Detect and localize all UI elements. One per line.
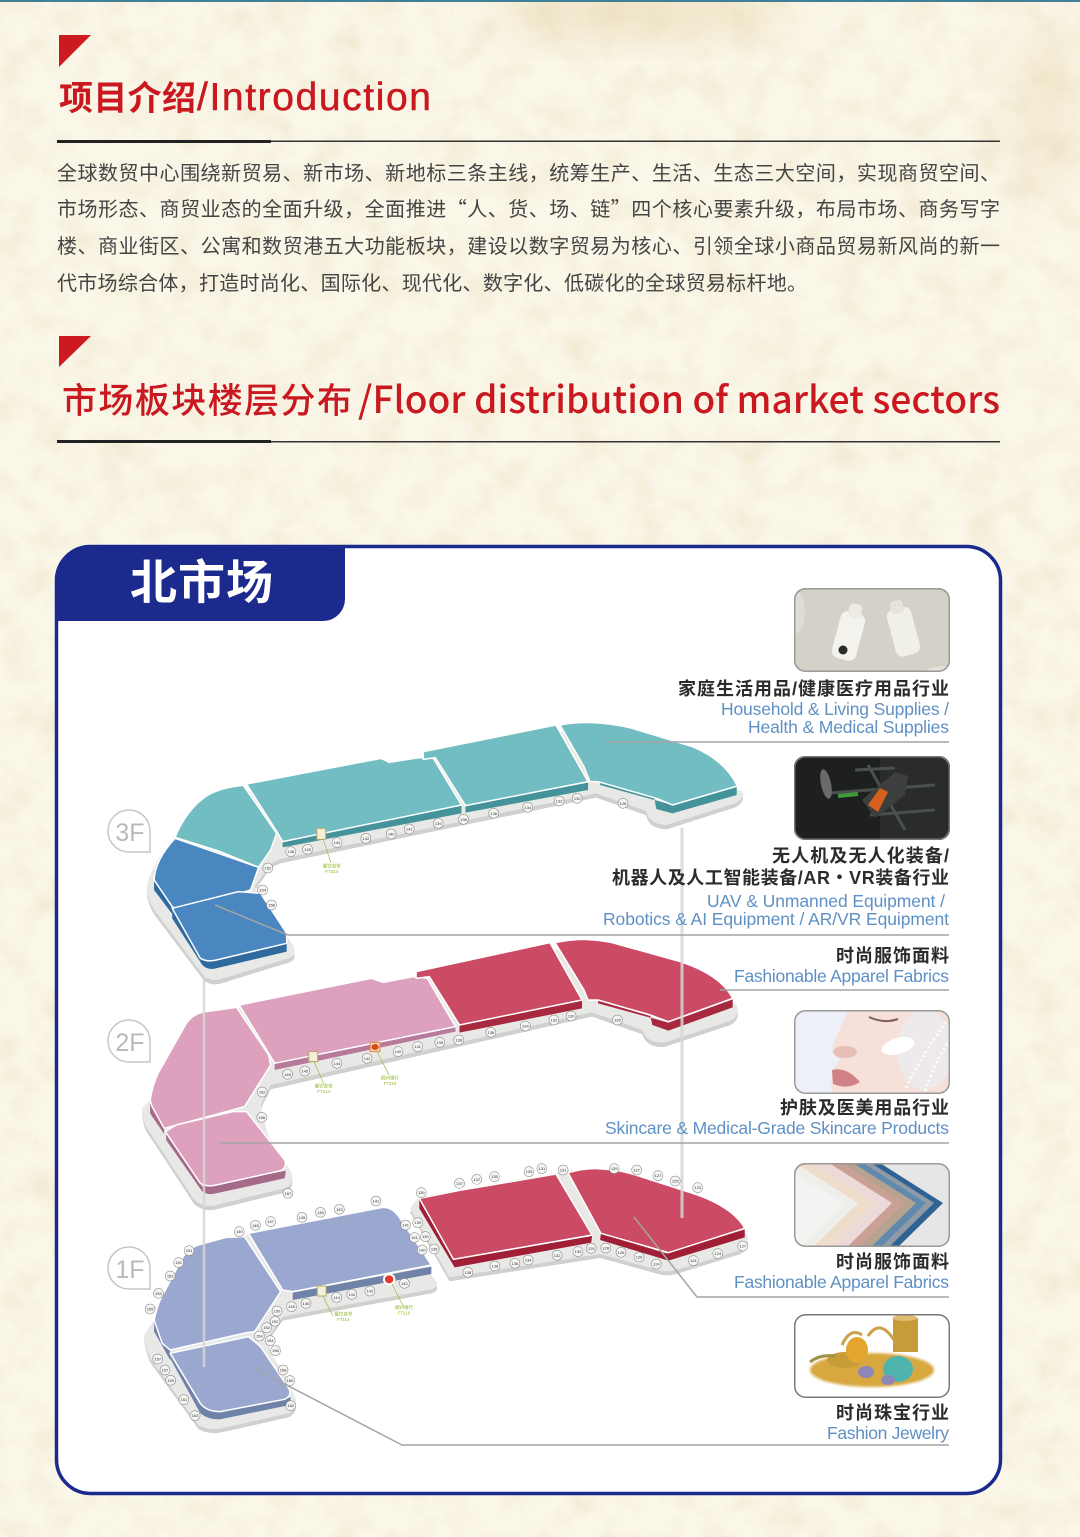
floor 3F plan: 126 (620, 801, 627, 806)
floor 3F plan: 141 (406, 826, 413, 831)
floor 1F plan: 142 (367, 1288, 374, 1293)
tab: north market title (55, 545, 345, 621)
floor 1F plan: 131 (539, 1166, 546, 1171)
tab: north market title: 北市场 (130, 556, 273, 609)
label: apparel fabrics 1F (634, 1217, 949, 1297)
floor 1F plan: 141 (411, 1235, 419, 1240)
floor 3F plan: 138 (460, 817, 468, 822)
floor 3F plan: 142 (363, 836, 370, 841)
floor 1F plan: 126 (618, 1250, 625, 1255)
floor 3F plan (147, 723, 743, 984)
floor 1F plan: 139 (422, 1234, 429, 1239)
introduction paragraph (57, 157, 1000, 296)
introduction paragraph: 代市场综合体，打造时尚化、国际化、现代化、数字化、低碳化的全球贸易标杆地。 (57, 267, 807, 296)
floor 1F plan: 124 (714, 1251, 722, 1256)
label: apparel fabrics 2F: 时尚服饰面料 (836, 946, 949, 966)
introduction paragraph: 全球数贸中心围绕新贸易、新市场、新地标三条主线，统筹生产、生活、生态三大空间，实现商贸空间、 (57, 157, 1000, 186)
photo: jewelry (794, 1314, 950, 1398)
floor 1F plan: 141 (373, 1198, 380, 1203)
floor 2F plan: 141 (414, 1044, 422, 1049)
floor 3F plan: 144 (334, 840, 341, 845)
floor 1F plan: 162 (287, 1403, 295, 1408)
label: household and medical supplies (606, 678, 949, 742)
label: apparel fabrics 2F (720, 946, 949, 990)
floor 1F plan: 126 (636, 1254, 643, 1259)
floor 1F plan: F7114 (337, 1317, 350, 1322)
section heading: floor distribution (57, 336, 1000, 443)
floor 1F plan: 163 (192, 1413, 199, 1418)
photo: skincare face (794, 1010, 953, 1094)
floor 3F plan: 130 (574, 796, 581, 801)
floor 3F plan: 134 (524, 805, 532, 810)
floor 2F plan: 138 (455, 1037, 463, 1042)
floor 3F plan: F7314 (325, 869, 339, 874)
section heading: introduction: /Introduction (197, 76, 431, 119)
floor 1F plan: 136 (512, 1261, 519, 1266)
floor 1F plan: 141 (402, 1222, 410, 1227)
floor 3F plan: 152 (264, 865, 272, 870)
floor tag 3F: 3F (115, 819, 145, 847)
floor 1F plan: 161 (180, 1397, 188, 1402)
label: household and medical supplies: 家庭生活用品/健康医疗用品行业 (678, 678, 949, 699)
floor 1F plan: 140 (401, 1281, 409, 1286)
floor 3F plan: 145 (304, 847, 312, 852)
label: skincare (220, 1097, 949, 1143)
floor 2F plan: 144 (334, 1061, 341, 1066)
label: household and medical supplies: Household & Living Supplies / (721, 699, 949, 719)
floor 1F plan: 稠州银行 (395, 1304, 414, 1311)
floor 1F plan: 145 (299, 1215, 306, 1220)
floor 1F plan: 152 (263, 1325, 271, 1330)
floor 3F plan: 140 (388, 831, 395, 836)
floor 1F plan: 144 (333, 1295, 341, 1300)
photo: household supplies bottles (794, 588, 950, 672)
floor 1F plan: 144 (348, 1292, 356, 1297)
floor 1F plan: 129 (611, 1166, 618, 1171)
label: jewelry: 时尚珠宝行业 (836, 1402, 949, 1423)
floor 2F plan: 152 (259, 1089, 266, 1094)
floor 1F plan: 128 (588, 1246, 595, 1251)
floor 1F plan: 140 (419, 1247, 426, 1252)
floor 1F plan: 156 (272, 1348, 280, 1353)
floor tag 1F: 1F (115, 1256, 145, 1284)
floor tag 3F (108, 810, 150, 852)
floor 1F plan: 148 (252, 1223, 259, 1228)
floor 2F plan: 142 (364, 1056, 371, 1061)
floor tag 2F: 2F (115, 1029, 145, 1057)
floor 1F plan: 124 (653, 1261, 660, 1266)
floor 1F plan: 139 (414, 1220, 422, 1225)
vertical connector between floors (left) (203, 978, 205, 1367)
photo: drone (794, 756, 950, 840)
floor 1F plan: 151 (186, 1248, 193, 1253)
floor 1F plan: 149 (236, 1229, 243, 1234)
section heading: floor distribution: /Floor distribution of market sectors (358, 370, 1000, 424)
label: skincare: 护肤及医美用品行业 (780, 1097, 949, 1118)
label: household and medical supplies: Health & Medical Supplies (748, 717, 949, 737)
label: UAV robotics AR VR: Robotics & AI Equipment / AR/VR Equipment (603, 909, 949, 929)
floor 1F plan: 136 (491, 1263, 499, 1268)
floor 2F plan: 132 (551, 1017, 558, 1022)
floor 1F plan: 130 (575, 1249, 582, 1254)
floor 1F plan: 153 (155, 1291, 163, 1296)
floor 3F plan: 154 (259, 887, 267, 892)
floor 1F plan: 127 (633, 1167, 641, 1172)
floor tag 2F (108, 1020, 150, 1062)
floor 1F plan: 餐饮食堂 (334, 1311, 353, 1318)
floor 2F plan: 134 (522, 1023, 529, 1028)
floor 1F plan: 147 (267, 1219, 275, 1224)
label: jewelry (252, 1367, 949, 1445)
floor 1F plan: 124 (690, 1258, 697, 1263)
panel: north market (55, 545, 1000, 1494)
floor 2F plan: 146 (284, 1072, 292, 1077)
floor 1F plan: 135 (491, 1174, 499, 1179)
floor 2F plan: 139 (436, 1040, 444, 1045)
section heading: introduction (57, 35, 1000, 143)
floor 1F plan: 145 (317, 1210, 325, 1215)
floor 1F plan: 154 (267, 1338, 274, 1343)
floor 1F plan: 125 (672, 1178, 679, 1183)
floor 1F plan: 137 (456, 1181, 464, 1186)
label: UAV robotics AR VR (215, 845, 949, 935)
floor 1F plan: 143 (336, 1207, 343, 1212)
floor 3F plan: 132 (556, 798, 563, 803)
introduction paragraph: 楼、商业街区、公寓和数贸港五大功能板块，建设以数字贸易为核心、引领全球小商品贸易新风尚的新一 (57, 230, 1000, 259)
floor 1F plan: 127 (655, 1173, 662, 1178)
floor 1F plan: 134 (525, 1257, 532, 1262)
floor 1F plan: 150 (274, 1308, 281, 1313)
floor 1F plan: 151 (175, 1260, 183, 1265)
floor 1F plan: 152 (272, 1319, 279, 1324)
floor 1F plan: 138 (465, 1270, 472, 1275)
floor 1F plan: 131 (560, 1167, 567, 1172)
photo: fabric swatches (794, 1163, 950, 1247)
label: UAV robotics AR VR: 机器人及人工智能装备/AR・VR装备行业 (612, 867, 949, 888)
floor 1F plan: 133 (526, 1169, 533, 1174)
floor 2F plan: F7214 (317, 1089, 331, 1094)
floor 2F plan: 餐饮食堂 (315, 1082, 333, 1089)
floor 1F plan: 127 (739, 1243, 747, 1248)
label: skincare: Skincare & Medical-Grade Skincare Products (605, 1118, 949, 1138)
floor 1F plan: 137 (473, 1177, 481, 1182)
floor 2F plan: 157 (285, 1191, 292, 1196)
floor 1F plan: 139 (418, 1190, 425, 1195)
floor 3F plan: 136 (490, 811, 498, 816)
floor 3F plan: 158 (268, 902, 276, 907)
floor 2F plan: 136 (487, 1030, 495, 1035)
label: UAV robotics AR VR: 无人机及无人化装备/ (772, 845, 949, 866)
floor 1F plan: 157 (162, 1367, 169, 1372)
label: apparel fabrics 2F: Fashionable Apparel Fabrics (734, 966, 949, 986)
floor 1F plan: 159 (167, 1378, 175, 1383)
floor 2F plan: 130 (568, 1013, 575, 1018)
introduction paragraph: 市场形态、商贸业态的全面升级，全面推进“人、货、场、链”四个核心要素升级，布局市场、商务写字 (57, 193, 1000, 222)
floor 2F plan: 145 (301, 1068, 309, 1073)
label: jewelry: Fashion Jewelry (827, 1423, 949, 1443)
section heading: introduction: 项目介绍 (59, 80, 196, 118)
floor 2F plan: 稠州银行 (381, 1074, 399, 1081)
floor 1F plan: 146 (303, 1301, 310, 1306)
floor 1F plan (144, 1164, 748, 1433)
label: UAV robotics AR VR: UAV & Unmanned Equipment / (707, 891, 945, 911)
floor 2F plan: F7210 (384, 1081, 397, 1086)
vertical connector between floors (right) (680, 828, 684, 1218)
label: apparel fabrics 1F: Fashionable Apparel Fabrics (734, 1272, 949, 1292)
floor 1F plan: 148 (288, 1304, 296, 1309)
floor 2F plan: 140 (395, 1049, 402, 1054)
floor 1F plan: 132 (554, 1253, 561, 1258)
floor 1F plan: 138 (431, 1246, 438, 1251)
floor 1F plan: 153 (167, 1273, 174, 1278)
floor 1F plan: 155 (147, 1306, 154, 1311)
floor 3F plan: 139 (435, 821, 442, 826)
floor 1F plan: 128 (602, 1245, 610, 1250)
section heading: floor distribution: 市场板块楼层分布 (62, 382, 352, 421)
floor 1F plan: 158 (280, 1367, 287, 1372)
floor 2F plan: 156 (258, 1115, 266, 1120)
floor 1F plan: F7110 (398, 1310, 411, 1315)
floor 1F plan: 123 (694, 1185, 702, 1190)
label: apparel fabrics 1F: 时尚服饰面料 (836, 1252, 949, 1272)
floor 2F plan: 126 (614, 1017, 621, 1022)
floor 3F plan: 餐饮食堂 (323, 862, 341, 869)
floor 3F plan: 146 (287, 849, 295, 854)
floor 1F plan: 160 (287, 1378, 294, 1383)
floor tag 1F (108, 1247, 150, 1289)
floor 1F plan: 157 (154, 1356, 162, 1361)
floor 2F plan (142, 939, 738, 1210)
floor 1F plan: 154 (256, 1333, 263, 1338)
